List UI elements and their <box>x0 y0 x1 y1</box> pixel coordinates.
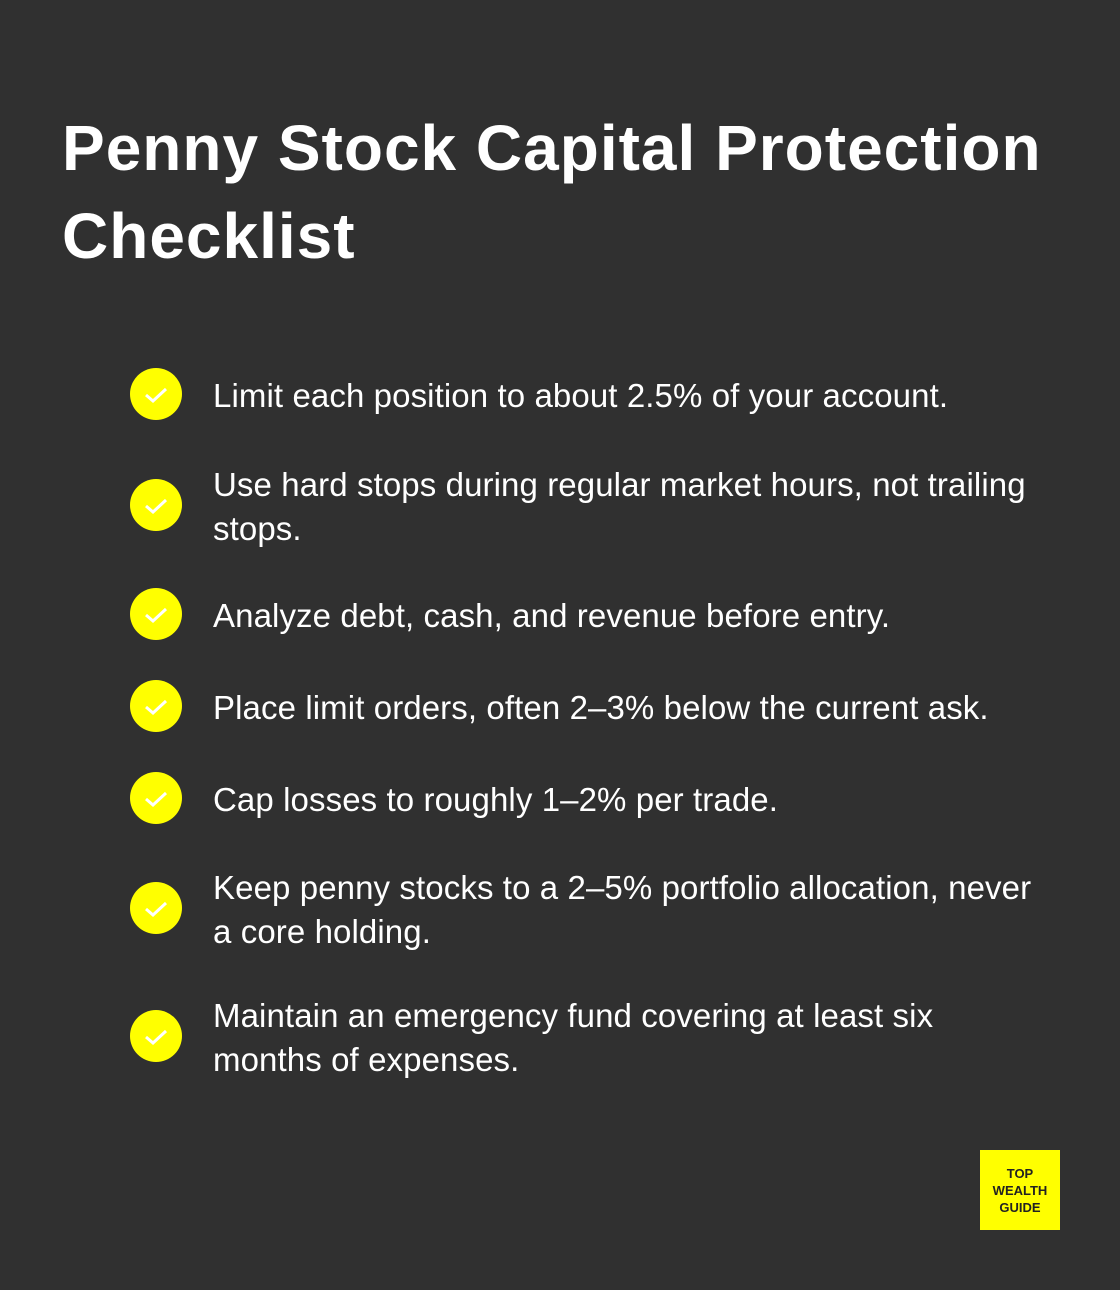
item 3: Analyze debt, cash, and revenue before entry. <box>213 596 890 634</box>
item 4: Place limit orders, often 2–3% below the current ask. <box>213 688 989 726</box>
logo <box>980 1150 1060 1230</box>
item 6: Keep penny stocks to a 2–5% portfolio allocation, never <box>213 868 1031 906</box>
item 5 <box>130 772 778 824</box>
item 7 <box>130 996 933 1078</box>
item 2: Use hard stops during regular market hours, not trailing <box>213 466 1026 502</box>
item 2: stops. <box>213 510 302 546</box>
item 6 <box>130 868 1031 950</box>
item 2 <box>130 466 1026 547</box>
item 1 <box>130 368 948 420</box>
item 3 <box>130 588 890 640</box>
logo: GUIDE <box>999 1200 1041 1214</box>
item 4 <box>130 680 989 732</box>
logo: WEALTH <box>993 1182 1047 1198</box>
item 5: Cap losses to roughly 1–2% per trade. <box>213 780 778 818</box>
item 7: Maintain an emergency fund covering at least six <box>213 996 933 1034</box>
logo: TOP <box>1007 1166 1033 1180</box>
item 7: months of expenses. <box>213 1040 519 1078</box>
checklist <box>130 368 1031 1078</box>
title: Penny Stock Capital Protection Checklist <box>62 112 1042 272</box>
item 6: a core holding. <box>213 912 431 950</box>
item 1: Limit each position to about 2.5% of your account. <box>213 376 948 414</box>
